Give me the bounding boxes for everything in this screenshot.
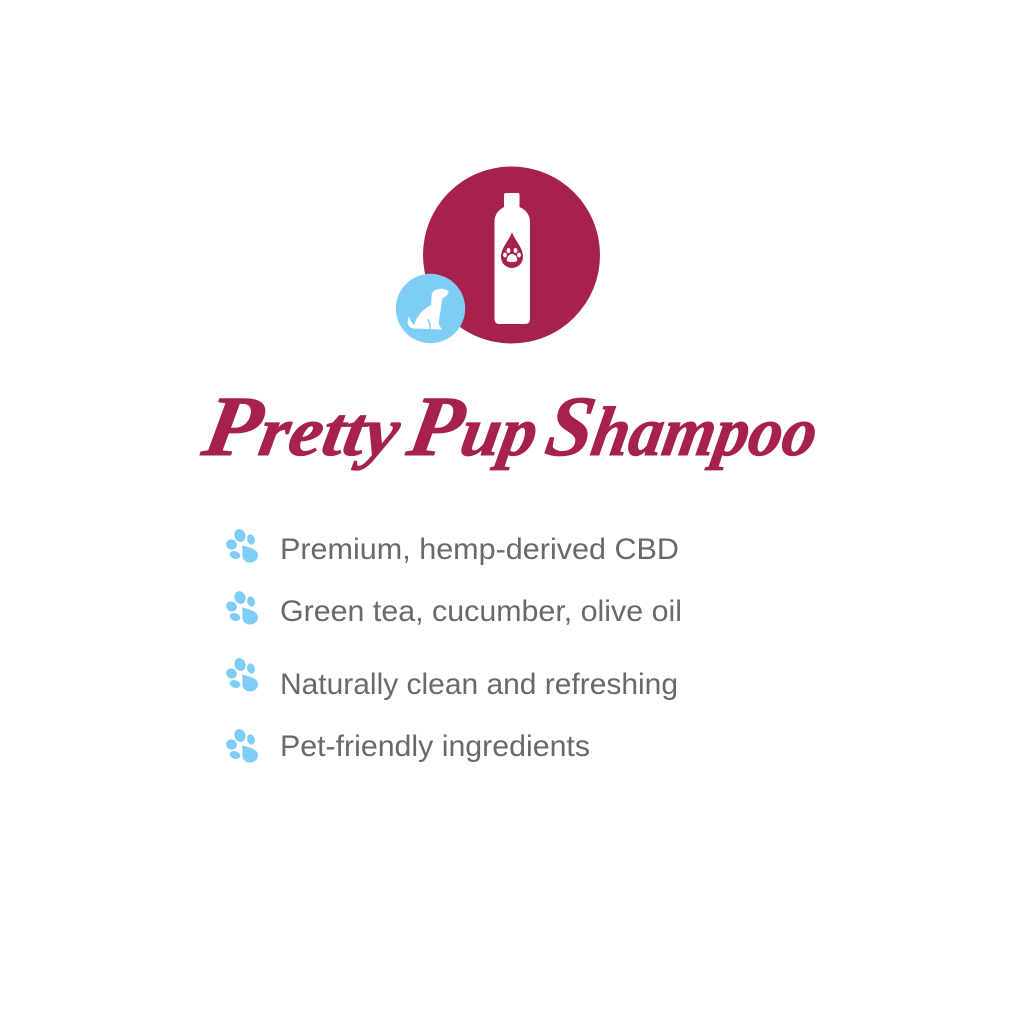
bullet: naturally clean: [224, 656, 678, 701]
title: Pup: [401, 379, 546, 474]
icon: shampoo bottle badge: [423, 166, 600, 344]
icon: sitting dog: [408, 289, 449, 330]
bullet: naturally clean: Naturally clean and refreshing: [280, 668, 678, 701]
bullet: pet-friendly: Pet-friendly ingredients: [280, 730, 590, 763]
icon: dog badge: [396, 274, 465, 343]
title: [196, 379, 826, 474]
icon: bottle: [494, 193, 530, 324]
bullet: green tea: Green tea, cucumber, olive oil: [280, 595, 682, 628]
title: Pretty: [196, 379, 409, 474]
title: Shampoo: [540, 379, 826, 474]
icon: drop with paw: [501, 232, 523, 268]
bullet: premium CBD: Premium, hemp-derived CBD: [280, 533, 679, 566]
